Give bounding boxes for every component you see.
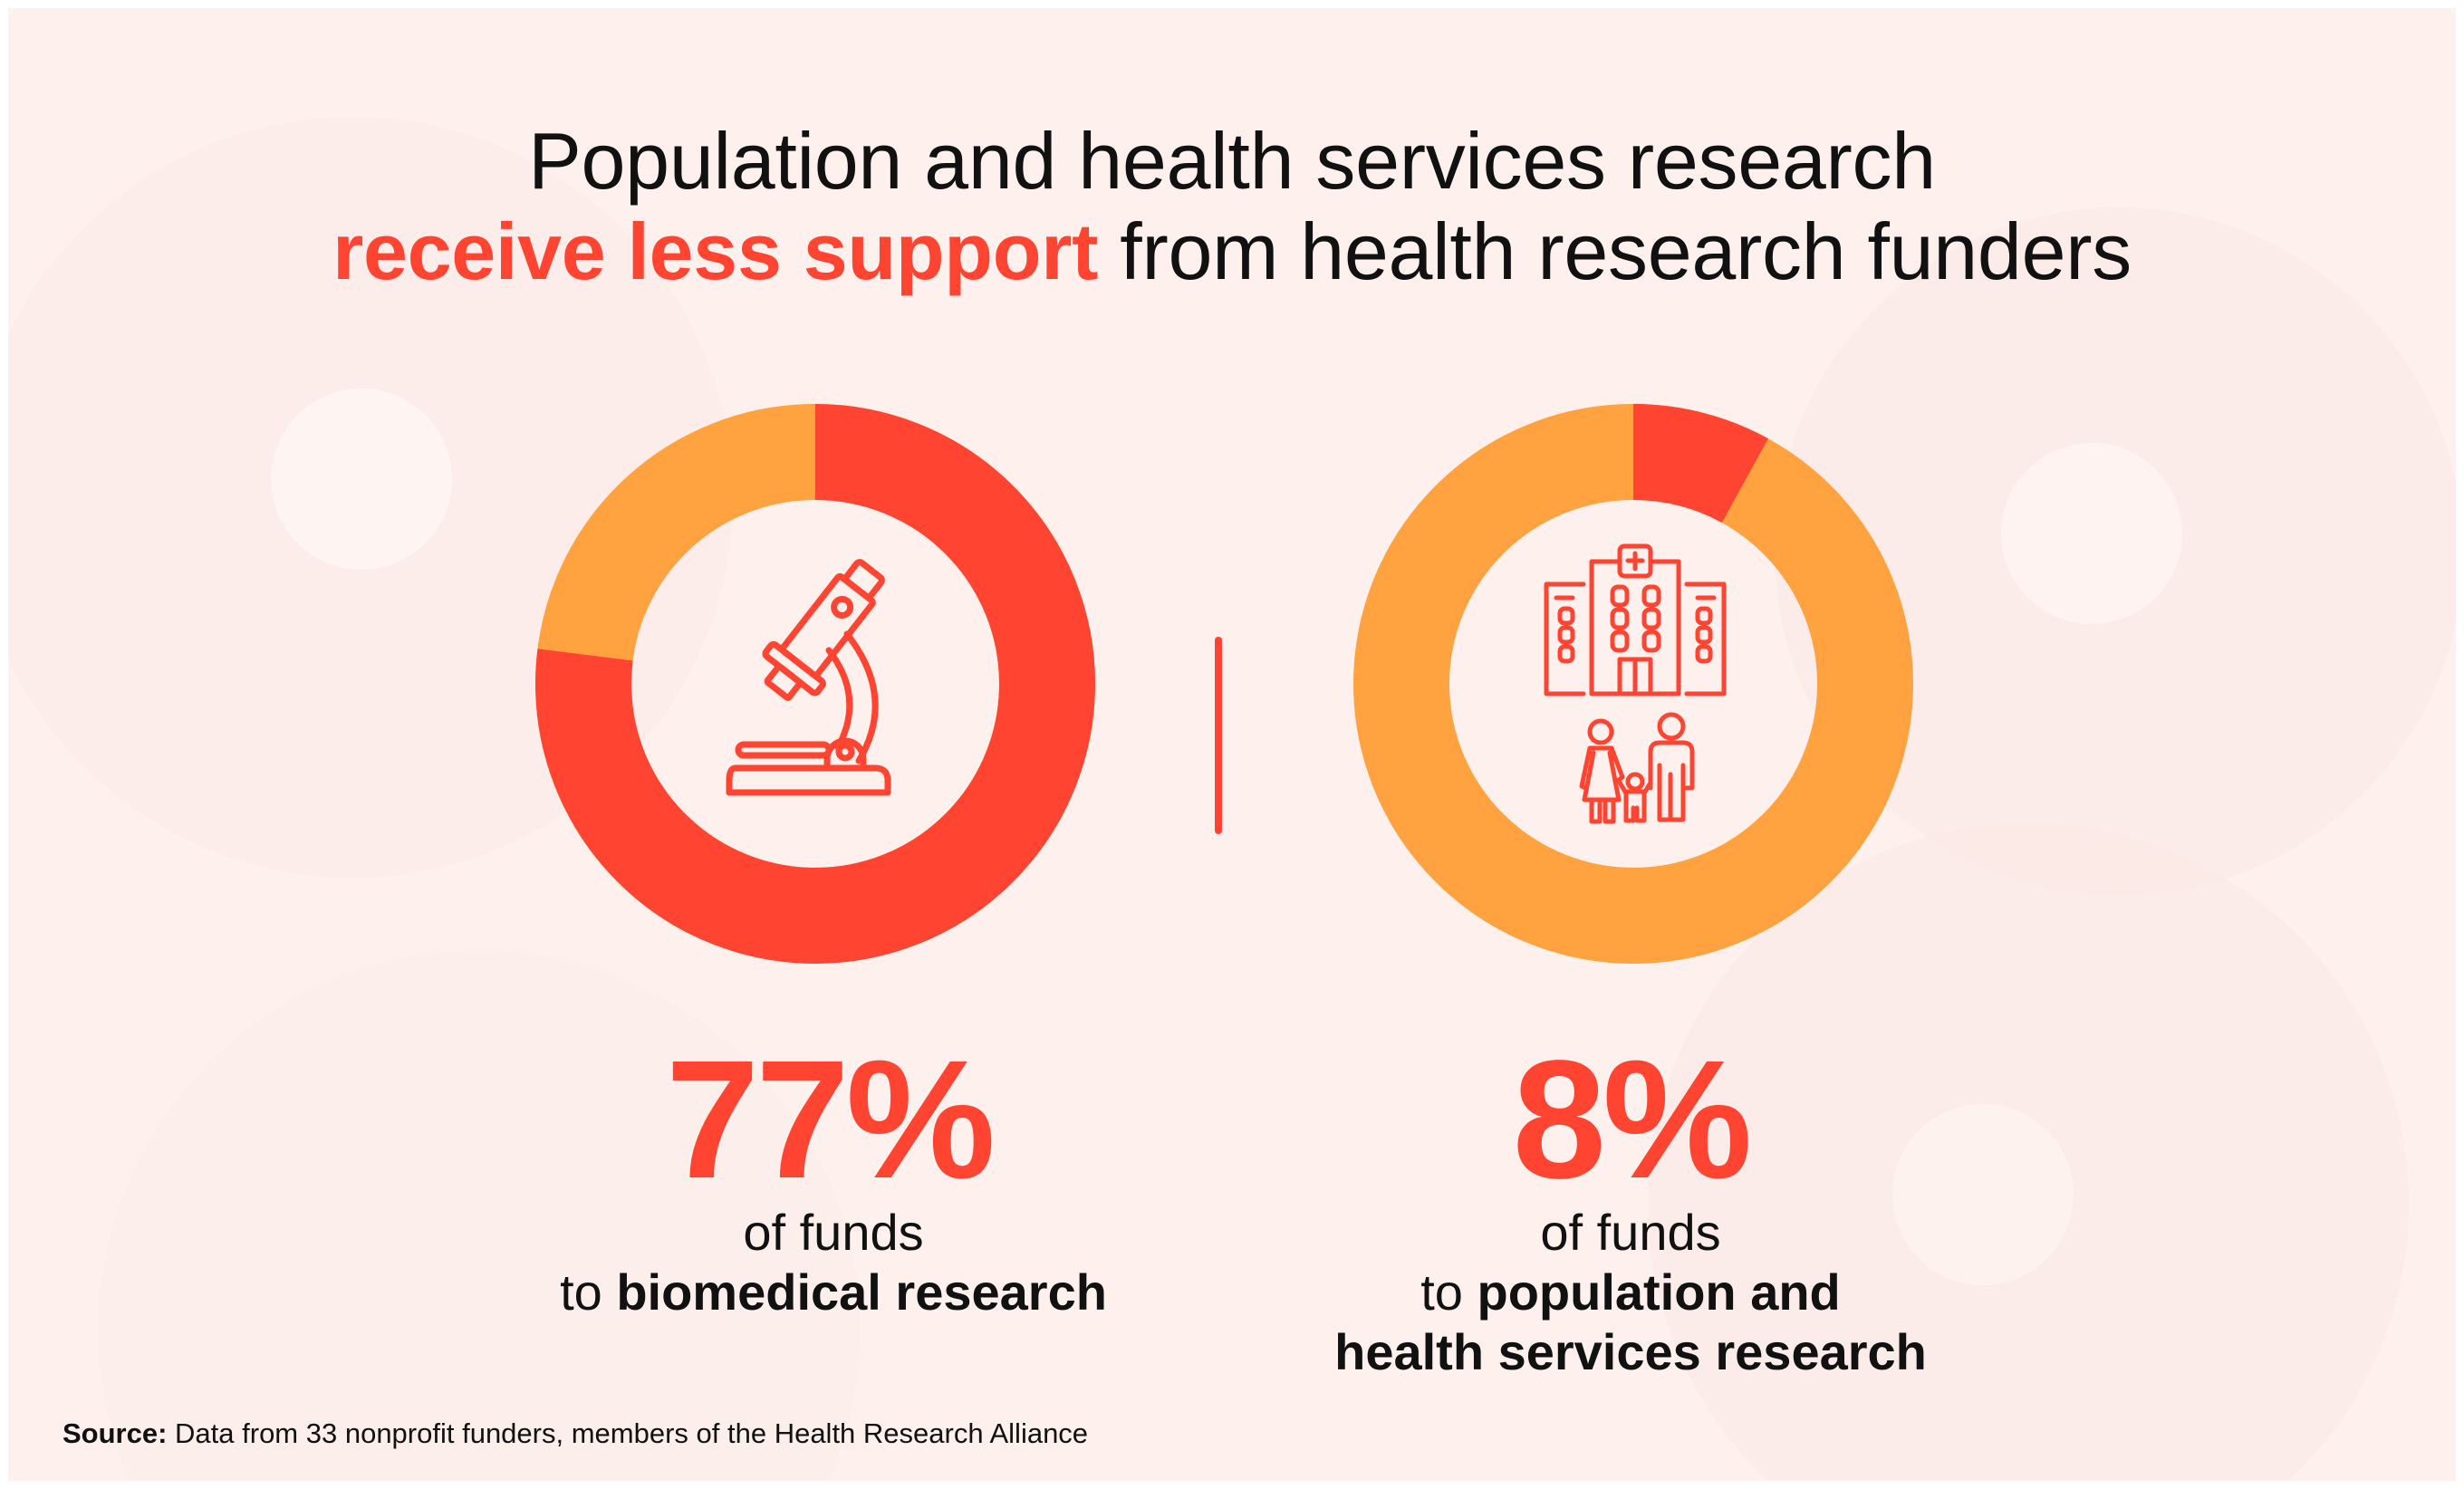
label: population: of funds bbox=[1540, 1204, 1721, 1261]
stat: 8%: 8% bbox=[1513, 1026, 1748, 1214]
label: biomedical bbox=[560, 1204, 1107, 1321]
label: biomedical: to biomedical research bbox=[560, 1263, 1107, 1321]
label: biomedical: of funds bbox=[743, 1204, 924, 1261]
label: population: to population and bbox=[1420, 1263, 1841, 1321]
title: Population and health services research bbox=[528, 116, 1936, 206]
label: population: health services research bbox=[1334, 1323, 1927, 1380]
label: population bbox=[1334, 1204, 1927, 1380]
title: receive less support from health research funders bbox=[332, 207, 2132, 296]
title bbox=[332, 116, 2132, 296]
divider bbox=[1215, 637, 1222, 834]
stat: 77%: 77% bbox=[666, 1026, 992, 1214]
source: Source: Data from 33 nonprofit funders, members of the Health Research Alliance bbox=[63, 1417, 1088, 1449]
